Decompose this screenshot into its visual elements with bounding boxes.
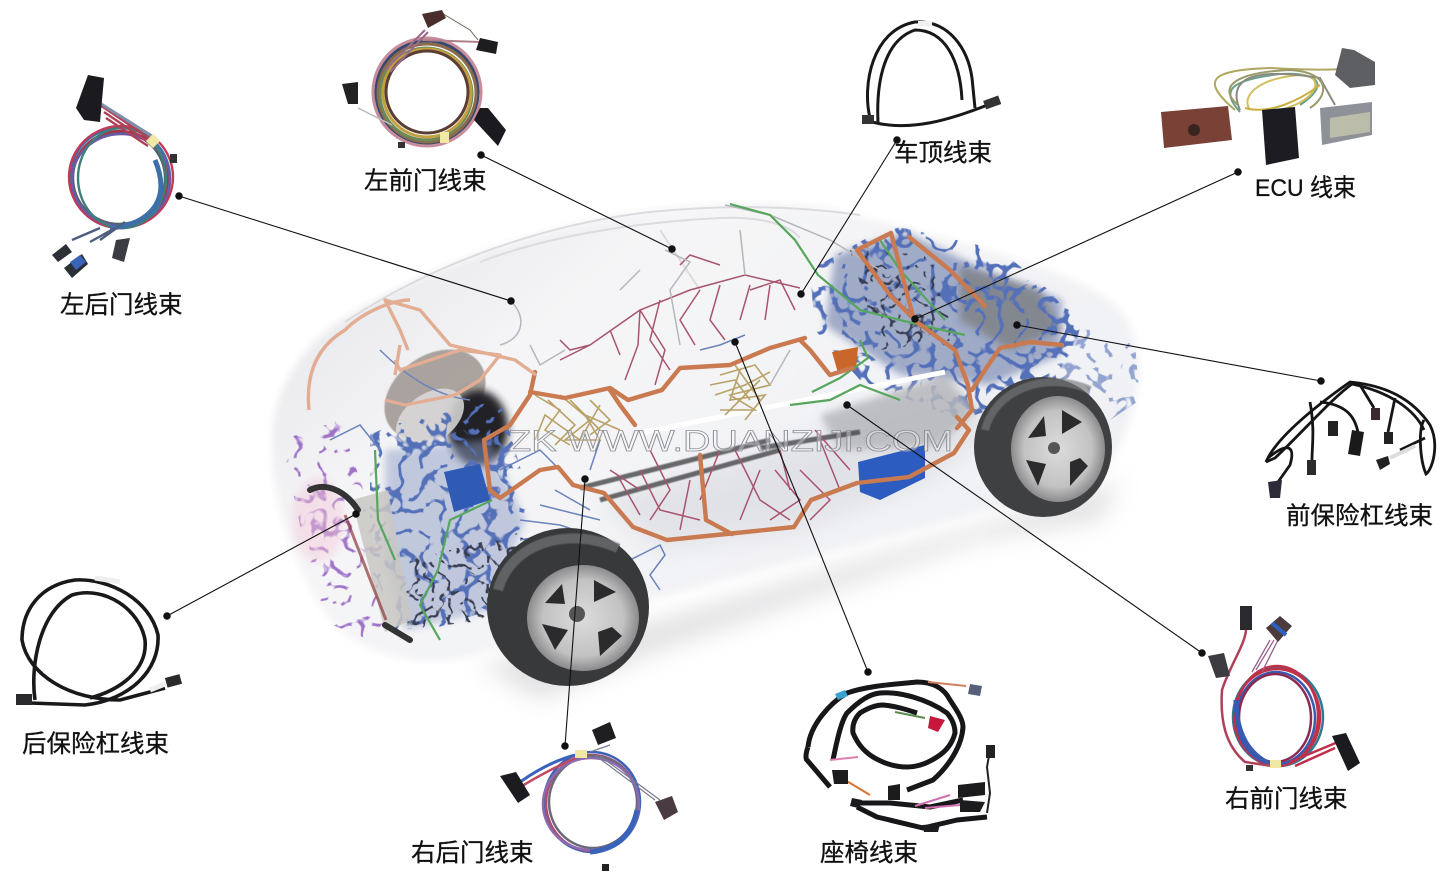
small clip xyxy=(1246,765,1253,771)
blue clip xyxy=(835,690,848,700)
maroon wires xyxy=(560,255,850,530)
right connector xyxy=(655,796,678,820)
connector 5 xyxy=(1384,432,1393,444)
roof glass outline xyxy=(345,207,860,322)
harness: seat xyxy=(806,682,995,832)
harness: left rear door xyxy=(52,75,177,278)
dark plug xyxy=(112,238,130,262)
radiator rail xyxy=(345,515,386,620)
pink glow at tail xyxy=(292,478,344,562)
rear blue module xyxy=(444,464,490,512)
rear blue-grey haze xyxy=(385,440,525,630)
spare tyre xyxy=(367,331,503,459)
label: roof: 车顶线束 xyxy=(894,139,992,167)
small clip xyxy=(602,864,609,871)
leader: left front door xyxy=(478,152,675,252)
top connector xyxy=(592,722,616,745)
front rim gaps xyxy=(1026,410,1088,486)
front tyre xyxy=(974,377,1112,517)
connector 6 xyxy=(1376,456,1390,470)
rear hub xyxy=(569,606,585,622)
harness: front bumper xyxy=(1266,382,1435,498)
leader: roof xyxy=(798,137,900,297)
rear tyre tread highlight xyxy=(498,538,618,590)
grey upper connector xyxy=(1335,48,1375,88)
grey connector xyxy=(968,684,982,696)
orange main harness xyxy=(484,233,1062,540)
grey-white interior wires xyxy=(500,205,880,385)
coloured wires xyxy=(1215,68,1350,112)
wire loop xyxy=(69,102,173,242)
grey connector face xyxy=(1330,112,1370,138)
rear dark filaments xyxy=(400,530,530,630)
front hub xyxy=(1048,442,1060,454)
leader: rear bumper xyxy=(164,511,359,619)
small connector xyxy=(170,154,177,163)
ground shadow xyxy=(480,480,1120,700)
orange tank xyxy=(832,347,858,373)
label: ECU: ECU 线束 xyxy=(1255,174,1356,202)
brown connector xyxy=(1161,106,1232,148)
spare wheel xyxy=(367,331,508,466)
label: right front door: 右前门线束 xyxy=(1225,785,1348,813)
black wires xyxy=(1266,382,1435,482)
leader: right rear door xyxy=(562,476,588,749)
top connector xyxy=(422,10,446,28)
left connector xyxy=(500,772,530,803)
rear hoses xyxy=(310,487,410,640)
leader: left rear door xyxy=(176,193,514,304)
green wires xyxy=(375,204,965,640)
rear wheel xyxy=(487,528,649,686)
engine wire filaments xyxy=(810,225,1085,420)
leader: right front door xyxy=(844,402,1205,656)
harness: rear bumper xyxy=(16,578,182,705)
tape xyxy=(440,132,449,143)
radiator xyxy=(352,490,412,632)
harness: right front door xyxy=(1208,606,1360,771)
black connector xyxy=(1262,107,1299,165)
rear tyre xyxy=(487,528,649,686)
front right wire filaments xyxy=(1060,320,1140,420)
car illustration xyxy=(272,203,1140,700)
harness: left front door xyxy=(342,10,506,148)
leader: front bumper xyxy=(1014,322,1324,384)
engine block xyxy=(960,265,1062,350)
tape xyxy=(1270,760,1281,768)
lower connectors xyxy=(52,244,88,278)
leader: ECU xyxy=(912,169,1241,322)
blue band xyxy=(1272,623,1286,635)
underbody floor panel xyxy=(600,390,1000,550)
blue-band connector xyxy=(1266,616,1292,642)
top connector xyxy=(1240,606,1252,630)
label: left front door: 左前门线束 xyxy=(364,167,486,195)
coloured wire tails xyxy=(830,682,966,808)
brown connector socket xyxy=(1188,124,1200,136)
exhaust pipes xyxy=(580,432,860,500)
translucent car body xyxy=(272,203,1139,661)
top-right connector xyxy=(986,745,995,758)
label: left rear door: 左后门线束 xyxy=(60,291,182,319)
engine dark filaments xyxy=(850,250,955,350)
white tags xyxy=(95,578,165,690)
blue wires xyxy=(330,335,745,590)
white sleeve xyxy=(1390,446,1415,458)
spare wheel hub xyxy=(448,390,508,466)
white propeller bar xyxy=(645,372,945,432)
right connector xyxy=(476,38,498,54)
large plug xyxy=(1348,430,1364,456)
battery xyxy=(858,445,925,500)
leader lines xyxy=(164,137,1324,749)
bottom connector xyxy=(1332,733,1360,771)
connector 2 xyxy=(1307,460,1316,475)
right connector xyxy=(983,96,1001,109)
connector 1 xyxy=(1268,480,1282,498)
left connector xyxy=(342,82,358,104)
rear rim gaps xyxy=(542,580,622,656)
pale upper rear harness xyxy=(308,300,536,410)
left connector xyxy=(16,694,32,705)
red connector xyxy=(928,716,945,732)
black wire loops xyxy=(867,22,990,126)
front tyre tread highlight xyxy=(985,382,1090,430)
front wheel xyxy=(974,377,1112,517)
spare rim xyxy=(385,377,475,459)
harness: ECU xyxy=(1161,48,1375,165)
harness: roof xyxy=(862,21,1001,126)
connector 3 xyxy=(1328,421,1338,436)
right connector xyxy=(165,674,182,688)
lower connectors xyxy=(832,770,985,832)
tan wire clusters xyxy=(535,365,770,445)
label: rear bumper: 后保险杠线束 xyxy=(22,730,169,758)
label: right rear door: 右后门线束 xyxy=(411,839,534,867)
left connector xyxy=(862,115,874,124)
grey lower connector xyxy=(1320,102,1372,145)
wire loop xyxy=(1222,630,1338,766)
white tag xyxy=(918,21,932,26)
connector 4 xyxy=(1371,408,1380,420)
leader: seat xyxy=(732,339,871,675)
label: seat: 座椅线束 xyxy=(820,839,918,867)
watermark: ZK WWW.DUANZIJI.COM xyxy=(508,425,953,458)
tape xyxy=(146,134,160,148)
engine body xyxy=(825,232,1062,385)
transmission tunnel xyxy=(820,375,975,450)
black wires xyxy=(806,682,987,828)
black wire loops xyxy=(22,580,165,705)
label: front bumper: 前保险杠线束 xyxy=(1286,502,1433,530)
front rim xyxy=(1011,396,1105,502)
side connector xyxy=(1208,653,1230,678)
tape xyxy=(575,750,587,758)
blue clip xyxy=(70,255,86,270)
wire loop xyxy=(520,745,660,852)
rear wire filaments xyxy=(370,400,530,640)
rear purple wires xyxy=(282,420,400,640)
harness: right rear door xyxy=(500,722,678,871)
rear rim xyxy=(527,565,639,671)
small clip xyxy=(398,142,405,148)
bottom connector xyxy=(474,108,506,146)
thin cable xyxy=(987,750,990,813)
wire loop xyxy=(358,12,481,146)
rear connector xyxy=(76,75,104,122)
